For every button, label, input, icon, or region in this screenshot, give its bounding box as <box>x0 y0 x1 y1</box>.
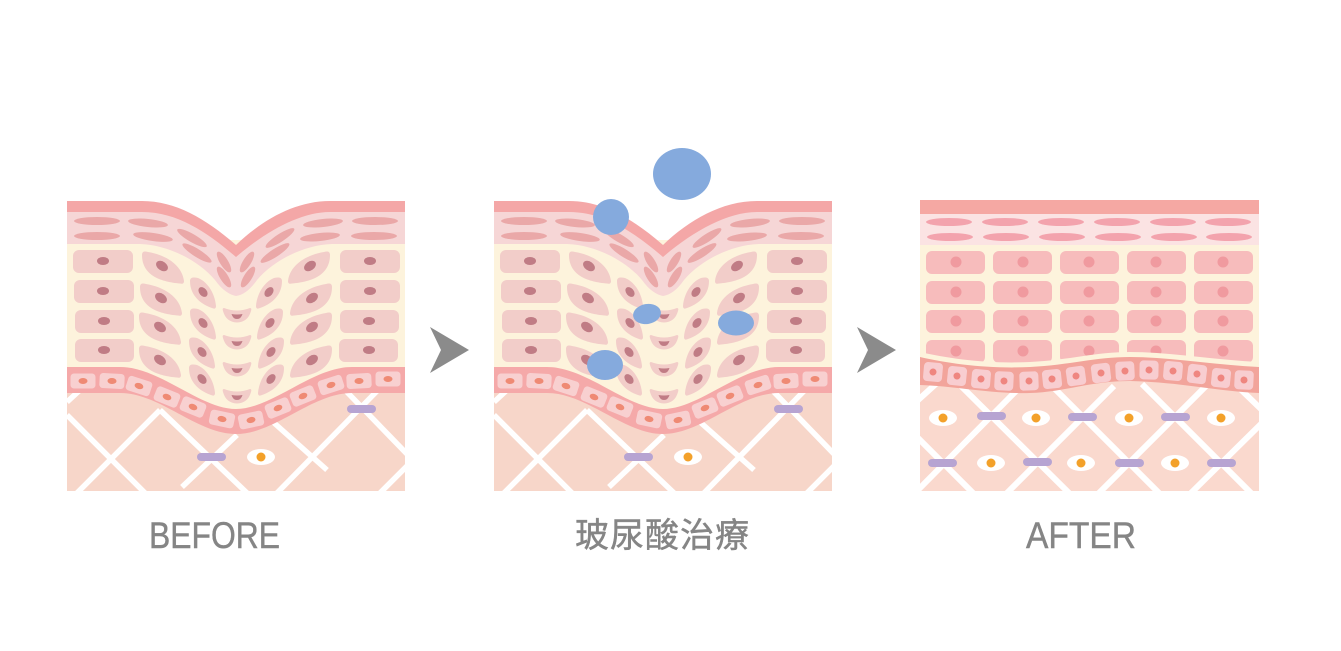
wavy basal membrane band <box>920 357 1259 393</box>
cream wave above basal membrane <box>920 352 1259 375</box>
pink upper epidermis layer <box>920 214 1259 245</box>
cream subcutaneous layer <box>67 240 405 420</box>
epidermis ovals <box>926 218 1252 241</box>
purple fibroblasts <box>197 405 376 461</box>
dermis layer with regular collagen lattice <box>915 378 1262 493</box>
basal membrane band <box>67 367 405 434</box>
top skin surface band <box>920 200 1259 214</box>
purple fibroblasts <box>928 412 1236 467</box>
arrow: treatment to after <box>857 327 896 373</box>
dermis layer with collagen lattice <box>67 385 407 493</box>
top skin surface band <box>67 201 405 257</box>
epidermis ovals <box>74 217 398 289</box>
plump rectangular cells <box>926 251 1253 363</box>
basal cells <box>70 372 400 430</box>
basal cells <box>923 360 1254 391</box>
panel: treatment skin cross-section <box>494 201 834 493</box>
rectangular cells, outer columns <box>73 250 400 362</box>
cell nuclei <box>97 257 376 400</box>
panel: after skin cross-section <box>915 200 1262 493</box>
arrow: before to treatment <box>430 327 469 373</box>
infographic: skin before and after hyaluronic acid treatment <box>67 148 1259 550</box>
panel: before skin cross-section <box>67 201 407 493</box>
cell nuclei <box>950 256 1228 356</box>
compressed leaf-shaped cells <box>139 251 332 404</box>
cream subcutaneous layer <box>920 244 1259 372</box>
label: BEFORE: BEFORE <box>149 515 280 556</box>
label: AFTER: AFTER <box>1026 515 1136 556</box>
collagen cell <box>247 449 275 465</box>
collagen cells <box>929 410 1235 471</box>
pink upper epidermis layer <box>67 206 405 296</box>
hyaluronic acid blue droplets <box>587 148 754 380</box>
label: hyaluronic acid treatment: 玻尿酸治療 <box>575 517 749 555</box>
